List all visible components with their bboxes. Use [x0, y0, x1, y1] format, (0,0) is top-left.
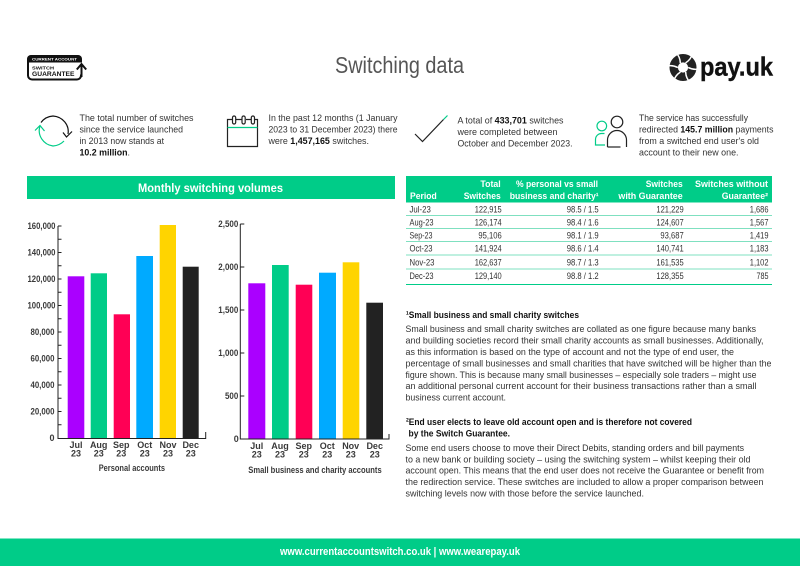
row: Jul-23: 98.5 / 1.5 [567, 204, 599, 214]
row: Jul-23 [410, 204, 768, 214]
chart caption: Personal accounts [99, 463, 165, 473]
note 1: small business and small charity switches: figure shown. This is because many small businesses – especially sole traders – might use [406, 370, 756, 381]
note 1: small business and small charity switches: percentage of small businesses and small charities that have switched will be higher than the [406, 358, 772, 369]
x axis labels: Aug [271, 441, 289, 451]
x axis labels: 23 [140, 448, 150, 458]
logo: Current Account Switch Guarantee [27, 55, 86, 80]
x axis labels: 23 [116, 448, 126, 458]
table header: % personal vs small [516, 179, 598, 189]
note 2: old account left open: by the Switch Guarantee. [408, 428, 510, 440]
bars [68, 225, 199, 438]
icon: circular arrows [35, 116, 72, 146]
note 2: old account left open [406, 417, 764, 500]
row: Nov-23: 98.7 / 1.3 [567, 258, 599, 268]
logo: pay.uk [666, 52, 773, 83]
y axis labels: 40,000 [30, 380, 54, 390]
row: Jul-23: Jul-23 [410, 204, 431, 214]
table header: Period [410, 191, 437, 201]
x axis labels: Sep [295, 441, 312, 451]
chart caption: Small business and charity accounts [248, 465, 382, 475]
x axis labels [69, 440, 199, 458]
x axis labels: Nov [159, 440, 177, 450]
y axis labels: 20,000 [30, 406, 54, 416]
note 1: small business and small charity switches [406, 310, 772, 404]
row: Dec-23: 98.8 / 1.2 [567, 271, 599, 281]
row: Sep-23: 93,687 [660, 230, 684, 240]
footer [0, 538, 800, 566]
table header: Switches [464, 191, 501, 201]
table header: Switches without [695, 179, 768, 189]
x axis labels: Nov [342, 441, 359, 451]
note 1: small business and small charity switches: as this information is based on the type of account and not the type of end user, the [406, 347, 734, 358]
row: Dec-23: 128,355 [656, 271, 684, 281]
x axis labels: 23 [252, 450, 262, 460]
row: Nov-23 [410, 258, 768, 268]
table: switching data by month [406, 176, 772, 284]
stat: total switches: in 2013 now stands at [80, 136, 164, 147]
table header: Switches [646, 179, 683, 189]
row: Sep-23: 95,106 [478, 230, 502, 240]
x axis labels: Oct [137, 440, 152, 450]
x axis labels: 23 [299, 450, 309, 460]
bar chart: personal accounts [28, 221, 206, 473]
stat: quarter total: October and December 2023. [458, 138, 572, 150]
row: Dec-23: 785 [756, 271, 768, 281]
stat: total switches: The total number of switches [80, 113, 194, 124]
row: Oct-23: 98.6 / 1.4 [567, 244, 599, 254]
row: Dec-23: 129,140 [475, 271, 502, 281]
bars [248, 262, 383, 439]
row: Oct-23: 1,183 [750, 244, 768, 254]
y axis labels: 120,000 [28, 274, 56, 284]
y axis labels: 2,000 [218, 262, 238, 272]
row: Aug-23: 126,174 [475, 217, 502, 227]
panel: monthly switching volumes heading: Monthly switching volumes [138, 181, 283, 195]
row: Aug-23: 98.4 / 1.6 [567, 217, 599, 227]
table rules [406, 216, 772, 284]
x axis labels: 23 [163, 448, 173, 458]
title: Switching data [335, 52, 464, 78]
y axis labels: 60,000 [30, 354, 54, 364]
row: Aug-23: 124,607 [656, 217, 684, 227]
y axis labels: 1,500 [218, 305, 238, 315]
x axis labels: 23 [275, 450, 285, 460]
x axis labels: Aug [90, 440, 107, 450]
row: Jul-23: 122,915 [475, 204, 502, 214]
note 2: old account left open: account open. This means that the end user does not receive the Guarantee or benefit from [406, 466, 764, 477]
table header: with Guarantee [617, 191, 683, 201]
stat: quarter total [415, 116, 572, 150]
icon: two people [596, 116, 627, 147]
x axis labels: Jul [250, 441, 263, 451]
stat: quarter total: were completed between [457, 127, 558, 138]
axes [240, 224, 389, 439]
logo: Current Account Switch Guarantee: SWITCH [32, 66, 55, 72]
y axis labels: 140,000 [28, 248, 56, 258]
y axis labels: 80,000 [30, 327, 54, 337]
x axis labels: 23 [94, 448, 104, 458]
stat: total switches: 10.2 million. [80, 148, 130, 158]
note 1: small business and small charity switches: and building societies record their small charity accounts as small businesses. Additionally, [406, 336, 764, 346]
note 1: small business and small charity switches: Small business and small charity switches are collated as one figure because many banks [406, 324, 756, 335]
table header: business and charity¹ [510, 191, 599, 201]
axes [58, 226, 206, 438]
icon: calendar [228, 116, 258, 146]
y axis labels: 0 [234, 434, 239, 444]
table header: Guarantee² [722, 191, 768, 201]
note 1: small business and small charity switches: business current account. [406, 393, 506, 404]
icon: pay.uk roundel [666, 52, 700, 83]
row: Oct-23: 140,741 [656, 244, 684, 254]
logo: Current Account Switch Guarantee: CURRENT ACCOUNT [32, 58, 78, 62]
x axis labels: 23 [186, 448, 196, 458]
row: Aug-23 [410, 217, 768, 227]
row: Nov-23: Nov-23 [410, 258, 434, 268]
x axis labels: 23 [370, 450, 380, 460]
y axis labels [28, 221, 56, 443]
stat: past 12 months: 2023 to 31 December 2023) there [268, 124, 398, 136]
row: Oct-23 [410, 244, 768, 254]
stat: redirected payments: from a switched end user's old [639, 136, 759, 147]
stat: total switches [35, 113, 194, 158]
stat: past 12 months: were 1,457,165 switches. [268, 136, 369, 147]
row: Nov-23: 162,637 [475, 258, 502, 268]
stat: past 12 months: In the past 12 months (1 January [268, 113, 398, 124]
stat: past 12 months [228, 113, 398, 147]
y axis labels: 160,000 [28, 221, 56, 231]
stat: total switches: since the service launched [80, 124, 183, 136]
row: Dec-23 [410, 271, 768, 281]
x axis labels [250, 441, 383, 460]
stat: redirected payments: account to their new one. [639, 148, 738, 158]
bar chart: small business and charity accounts [218, 219, 389, 475]
row: Jul-23: 1,686 [750, 204, 768, 214]
x axis labels: Oct [320, 441, 335, 451]
note 1: small business and small charity switches: ¹Small business and small charity switches [406, 310, 579, 321]
stat: redirected payments [596, 113, 774, 158]
x axis labels: 23 [71, 448, 81, 458]
logo: pay.uk: pay.uk [700, 52, 773, 82]
logo: Current Account Switch Guarantee: GUARANTEE [32, 71, 75, 78]
y axis labels: 1,000 [218, 348, 238, 358]
row: Nov-23: 1,102 [750, 258, 768, 268]
note 2: old account left open: Some end users choose to move their Direct Debits, standing orders and bill payments [406, 443, 744, 454]
row: Dec-23: Dec-23 [410, 271, 434, 281]
note 2: old account left open: the redirection service. These switches are included to allow a proper comparison between [406, 477, 764, 488]
note 2: old account left open: switching levels now with those before the service launched. [406, 488, 644, 500]
y axis labels: 2,500 [218, 219, 238, 229]
note 1: small business and small charity switches: an additional personal current account for their business transactions rather than a small [406, 381, 756, 392]
y axis labels: 0 [49, 433, 54, 443]
footer: www.currentaccountswitch.co.uk | www.wearepay.uk [279, 546, 521, 558]
row: Aug-23: 1,567 [750, 217, 768, 227]
stat: quarter total: A total of 433,701 switches [458, 116, 564, 126]
icon: check mark [415, 116, 448, 142]
y axis labels [218, 219, 239, 444]
stat: redirected payments: redirected 145.7 million payments [639, 124, 774, 136]
x axis labels: 23 [322, 450, 332, 460]
stat: redirected payments: The service has successfully [639, 113, 748, 124]
x axis labels: Jul [69, 440, 83, 450]
row: Sep-23: 98.1 / 1.9 [567, 230, 599, 240]
x axis labels: Dec [366, 441, 383, 451]
row: Oct-23: Oct-23 [410, 244, 432, 254]
note 2: old account left open: to a new bank or building society – using the switching system – whilst keeping their old [406, 454, 750, 465]
y axis labels: 500 [225, 391, 238, 401]
note 2: old account left open: ²End user elects to leave old account open and is therefore not covered [406, 417, 692, 428]
x axis labels: 23 [346, 450, 356, 460]
y axis labels: 100,000 [28, 300, 56, 310]
row: Sep-23: 1,419 [750, 230, 768, 240]
table header: Total [480, 179, 501, 189]
row: Sep-23 [410, 230, 768, 240]
panel: monthly switching volumes heading [27, 176, 395, 199]
x axis labels: Sep [113, 440, 130, 450]
table header [406, 176, 772, 202]
row: Oct-23: 141,924 [475, 244, 502, 254]
row: Aug-23: Aug-23 [410, 217, 434, 227]
x axis labels: Dec [182, 440, 199, 450]
row: Sep-23: Sep-23 [410, 230, 432, 240]
row: Nov-23: 161,535 [656, 258, 684, 268]
row: Jul-23: 121,229 [656, 204, 684, 214]
